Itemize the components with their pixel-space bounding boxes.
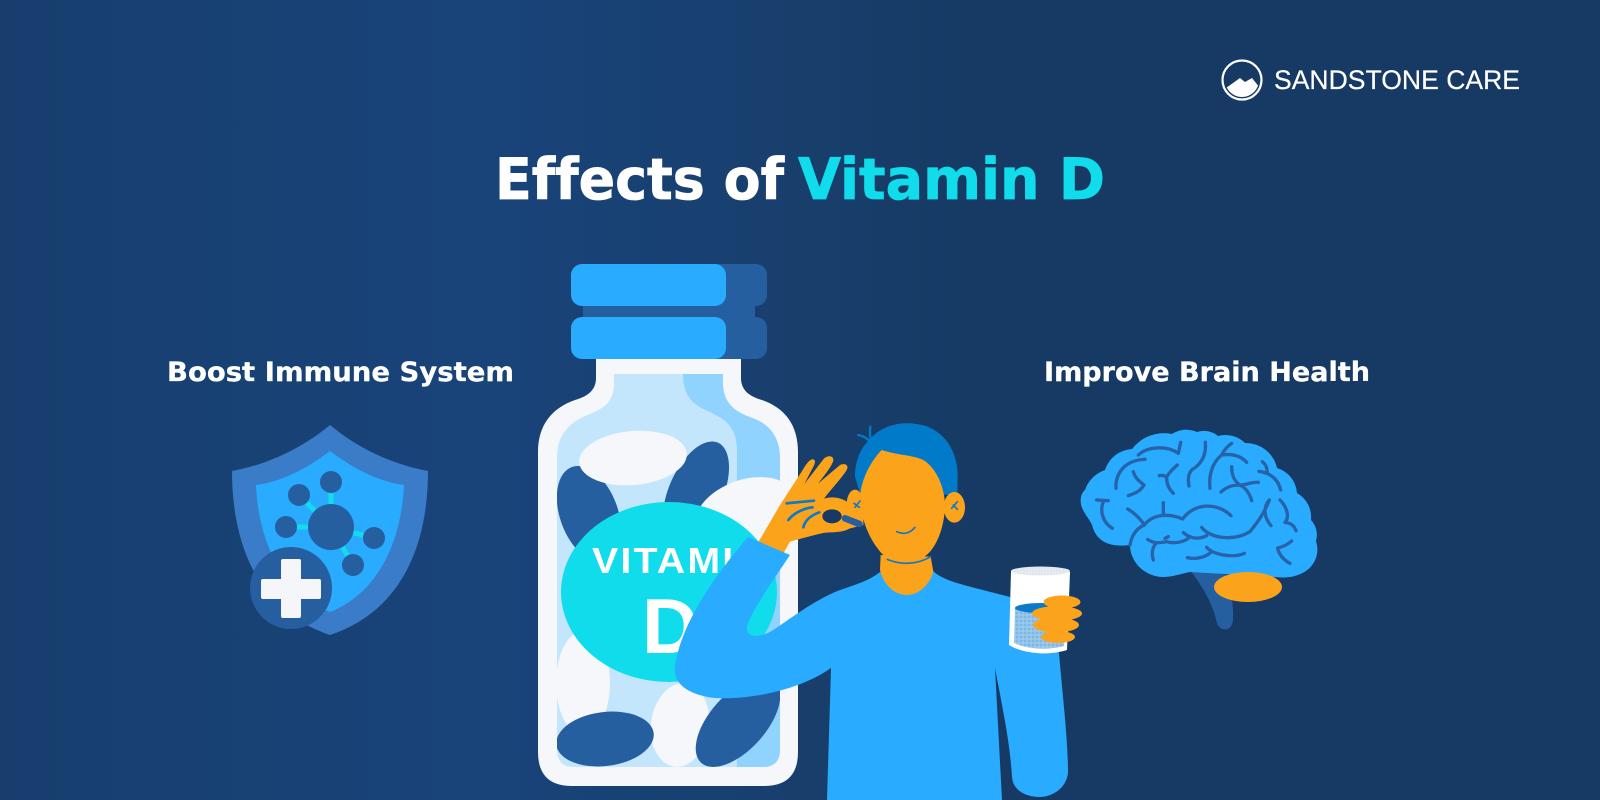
torso and arms [675, 537, 1068, 800]
glass rim [1011, 566, 1070, 576]
title: teal part: Vitamin D [798, 147, 1105, 213]
heading: Improve Brain Health: Improve Brain Health [1044, 357, 1370, 388]
vitamin label [561, 502, 777, 682]
brain folds [1097, 442, 1296, 563]
ears [847, 490, 965, 523]
shield outer [232, 425, 428, 635]
face lines [854, 501, 957, 563]
hand with pill [757, 456, 863, 553]
brain orange lobe [1214, 572, 1282, 602]
logo: Sandstone Care [1222, 60, 1520, 100]
person [675, 423, 1082, 800]
hair tuft [858, 427, 871, 441]
bottle glass frame [538, 359, 798, 786]
bottle interior [557, 374, 780, 767]
bottle [538, 264, 805, 786]
cell connectors [286, 482, 374, 565]
logo wordmark: SANDSTONE CARE [1274, 65, 1520, 95]
gripping fingers [1032, 596, 1082, 643]
icon: brain [1081, 430, 1317, 629]
icon: immune shield [232, 425, 428, 635]
title: white part: Effects of [495, 147, 785, 213]
title [495, 147, 1105, 213]
glass of water [1009, 566, 1070, 653]
heading: Boost Immune System: Boost Immune System [167, 357, 514, 388]
interior shade [683, 374, 780, 767]
label letter D: D [642, 582, 698, 670]
cell cluster [275, 471, 385, 576]
logo mark [1222, 60, 1262, 100]
label text: VITAMIN [592, 540, 766, 581]
brain body [1081, 430, 1317, 577]
white pills [557, 430, 780, 767]
brain stem [1190, 570, 1233, 629]
face [860, 450, 945, 562]
infographic canvas [169, 59, 1519, 800]
dark pills [557, 442, 729, 548]
finger gap [822, 509, 842, 523]
head [845, 423, 965, 595]
neck [880, 555, 933, 595]
palm lines [787, 501, 819, 527]
water [1014, 608, 1067, 649]
hair [855, 423, 958, 495]
bottle cap [571, 264, 767, 359]
lower dark pills [557, 690, 780, 767]
shield inner [256, 451, 404, 612]
pill in fingers [845, 518, 859, 524]
plus badge [250, 547, 332, 629]
water surface [1015, 603, 1067, 613]
